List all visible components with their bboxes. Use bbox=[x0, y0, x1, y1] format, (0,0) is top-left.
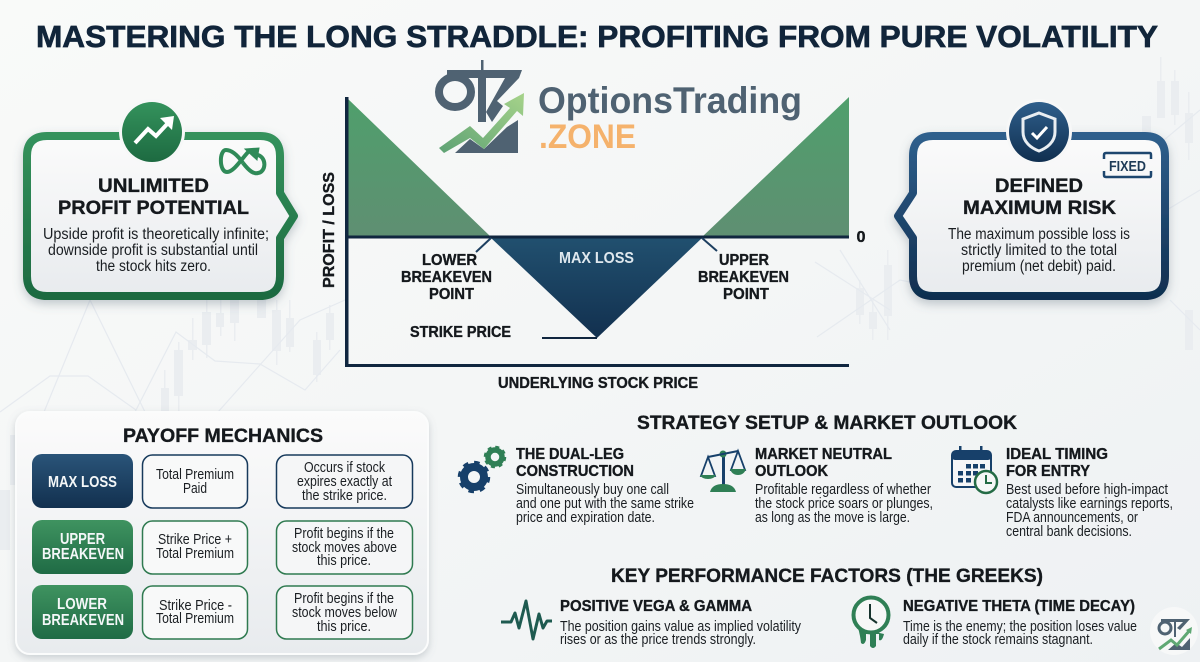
block: negative theta: NEGATIVE THETA (TIME DECAY) bbox=[903, 598, 1135, 615]
row: upper breakeven: UPPER bbox=[60, 531, 105, 548]
block: market neutral outlook bbox=[700, 446, 933, 526]
profit area left bbox=[347, 98, 491, 237]
heading bbox=[58, 176, 249, 219]
block: market neutral outlook: MARKET NEUTRAL bbox=[755, 446, 892, 463]
heading: MAXIMUM RISK bbox=[963, 198, 1116, 219]
lower breakeven label bbox=[401, 252, 492, 303]
row: upper breakeven: Strike Price + bbox=[158, 532, 232, 548]
body text bbox=[43, 226, 269, 275]
row: max loss: Occurs if stock bbox=[304, 460, 386, 476]
body text: Upside profit is theoretically infinite; bbox=[43, 226, 269, 243]
block: negative theta bbox=[854, 598, 1137, 648]
block: positive vega and gamma: rises or as the price trends strongly. bbox=[560, 632, 756, 648]
profit area right bbox=[702, 97, 849, 237]
block: ideal timing for entry: IDEAL TIMING bbox=[1006, 446, 1108, 463]
block: ideal timing for entry: central bank decisions. bbox=[1006, 524, 1132, 540]
lower breakeven label: BREAKEVEN bbox=[401, 269, 492, 286]
upper breakeven label: UPPER bbox=[719, 252, 769, 269]
block: ideal timing for entry: FOR ENTRY bbox=[1006, 463, 1090, 480]
block: positive vega and gamma: POSITIVE VEGA & GAMMA bbox=[560, 598, 752, 615]
zero label: 0 bbox=[856, 229, 866, 246]
row: lower breakeven: LOWER bbox=[57, 596, 107, 613]
row: lower breakeven: stock moves below bbox=[292, 605, 397, 621]
block: dual-leg construction: price and expiration date. bbox=[516, 510, 655, 526]
logo suffix: .ZONE bbox=[539, 118, 636, 156]
body text: strictly limited to the total bbox=[961, 242, 1117, 259]
body text: The maximum possible loss is bbox=[948, 226, 1130, 243]
row: max loss: the strike price. bbox=[302, 488, 387, 504]
block: market neutral outlook: the stock price soars or plunges, bbox=[755, 496, 933, 512]
icon: melting clock bbox=[854, 598, 888, 648]
logo bbox=[439, 60, 802, 156]
upper breakeven label: BREAKEVEN bbox=[698, 269, 789, 286]
block: market neutral outlook: as long as the move is large. bbox=[755, 510, 910, 526]
chart: long straddle payoff diagram bbox=[321, 97, 866, 392]
block: dual-leg construction: Simultaneously buy one call bbox=[516, 482, 669, 498]
body text: premium (net debit) paid. bbox=[962, 258, 1116, 275]
heading: key performance factors: KEY PERFORMANCE FACTORS (THE GREEKS) bbox=[611, 565, 1043, 587]
heading: PAYOFF MECHANICS bbox=[123, 425, 323, 447]
icon: volatility pulse bbox=[501, 601, 552, 639]
axis label: underlying stock price: UNDERLYING STOCK PRICE bbox=[498, 375, 698, 392]
row: upper breakeven: BREAKEVEN bbox=[42, 546, 124, 563]
icon: green circle with rising arrow bbox=[119, 99, 185, 165]
block: ideal timing for entry: catalysts like earnings reports, bbox=[1006, 496, 1173, 512]
block: dual-leg construction: CONSTRUCTION bbox=[516, 463, 634, 480]
block: positive vega and gamma: The position gains value as implied volatility bbox=[560, 619, 802, 635]
badge: small logo mark bbox=[1150, 607, 1198, 655]
upper breakeven label: POINT bbox=[723, 286, 769, 303]
logo mark bbox=[439, 60, 524, 153]
block: market neutral outlook: Profitable regardless of whether bbox=[755, 482, 931, 498]
row: upper breakeven: Profit begins if the bbox=[294, 526, 394, 542]
panel: payoff mechanics bbox=[16, 412, 428, 654]
lower breakeven label: POINT bbox=[429, 286, 474, 303]
block: ideal timing for entry: Best used before high-impact bbox=[1006, 482, 1168, 498]
block: ideal timing for entry bbox=[952, 446, 1173, 540]
strike price label: STRIKE PRICE bbox=[410, 324, 511, 341]
row: lower breakeven bbox=[32, 585, 412, 639]
row: lower breakeven: Strike Price - bbox=[159, 598, 232, 614]
row: lower breakeven: Total Premium bbox=[156, 611, 234, 627]
axis label: profit / loss: PROFIT / LOSS bbox=[321, 172, 338, 288]
block: market neutral outlook: OUTLOOK bbox=[755, 463, 828, 480]
row: max loss: expires exactly at bbox=[297, 474, 392, 490]
block: negative theta: Time is the enemy; the position loses value bbox=[903, 619, 1137, 635]
icon: fixed stamp: FIXED bbox=[1109, 158, 1146, 175]
row: max loss: MAX LOSS bbox=[48, 474, 117, 491]
icon: shield in blue circle bbox=[1006, 99, 1072, 165]
block: dual-leg construction bbox=[460, 446, 694, 526]
heading: DEFINED bbox=[995, 176, 1083, 197]
row: max loss: Total Premium bbox=[156, 467, 234, 483]
block: positive vega and gamma bbox=[501, 598, 802, 648]
row: upper breakeven: this price. bbox=[317, 553, 371, 569]
lower breakeven label: LOWER bbox=[422, 252, 477, 269]
row: upper breakeven: stock moves above bbox=[292, 540, 397, 556]
body text bbox=[948, 226, 1130, 275]
icon: infinity arrow bbox=[221, 148, 264, 173]
panel: defined maximum risk bbox=[898, 99, 1165, 296]
block: dual-leg construction: and one put with the same strike bbox=[516, 496, 694, 512]
icon: balance scale bbox=[700, 450, 746, 492]
icon: calendar with clock bbox=[952, 446, 997, 493]
max loss area bbox=[491, 238, 702, 338]
logo text: OptionsTrading bbox=[538, 80, 802, 121]
block: dual-leg construction: THE DUAL-LEG bbox=[516, 446, 624, 463]
icon: gears bbox=[460, 447, 505, 492]
row: lower breakeven: Profit begins if the bbox=[294, 591, 394, 607]
row: lower breakeven: this price. bbox=[317, 619, 371, 635]
block: ideal timing for entry: FDA announcements, or bbox=[1006, 510, 1138, 526]
row: max loss bbox=[32, 454, 412, 508]
heading bbox=[963, 176, 1116, 219]
max loss label: MAX LOSS bbox=[559, 250, 634, 267]
row: lower breakeven: BREAKEVEN bbox=[42, 612, 124, 629]
body text: downside profit is substantial until bbox=[48, 242, 258, 259]
icon: fixed stamp bbox=[1104, 153, 1151, 177]
heading: UNLIMITED bbox=[98, 176, 209, 197]
row: max loss: Paid bbox=[183, 481, 207, 497]
heading: PROFIT POTENTIAL bbox=[58, 198, 249, 219]
title: MASTERING THE LONG STRADDLE: PROFITING FROM PURE VOLATILITY bbox=[36, 19, 1158, 54]
panel: unlimited profit potential bbox=[27, 99, 294, 296]
heading: strategy setup: STRATEGY SETUP & MARKET OUTLOOK bbox=[637, 412, 1017, 434]
block: negative theta: daily if the stock remains stagnant. bbox=[903, 632, 1093, 648]
body text: the stock hits zero. bbox=[96, 258, 211, 275]
row: upper breakeven: Total Premium bbox=[156, 546, 234, 562]
upper breakeven label bbox=[698, 252, 789, 303]
row: upper breakeven bbox=[32, 520, 412, 574]
